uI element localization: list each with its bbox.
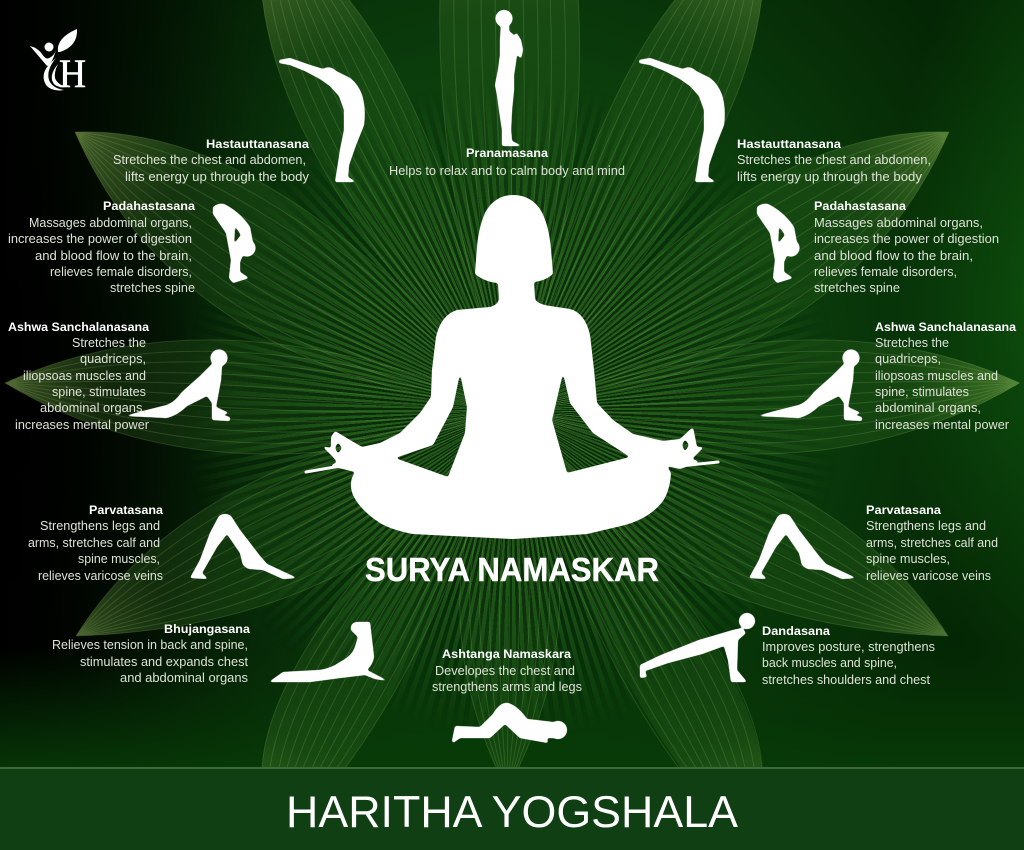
- text: Parvatasana left: Strengthens legs and: [40, 519, 160, 533]
- text: Ashwa Sanchalanasana left: quadriceps,: [80, 352, 146, 366]
- text: Padahastasana right: stretches spine: [814, 281, 900, 295]
- text: Ashtanga Namaskara: Ashtanga Namaskara: [442, 647, 571, 661]
- text: Ashwa Sanchalanasana right: abdominal organs,: [875, 401, 981, 415]
- text: Dandasana: stretches shoulders and chest: [762, 673, 931, 687]
- icon: Ashwa Sanchalanasana pose left: [125, 350, 230, 421]
- text: Padahastasana right: Massages abdominal organs,: [814, 216, 983, 230]
- heading: Surya Namaskar: SURYA NAMASKAR: [365, 551, 659, 588]
- text: Parvatasana right: arms, stretches calf and: [866, 536, 998, 550]
- text: Ashwa Sanchalanasana right: Stretches the: [875, 336, 949, 350]
- text: Parvatasana right: relieves varicose veins: [866, 569, 991, 583]
- text: Hastauttanasana left: [113, 137, 310, 184]
- text: Ashwa Sanchalanasana right: increases mental power: [875, 418, 1009, 432]
- text: Dandasana: back muscles and spine,: [762, 656, 897, 670]
- text: Padahastasana left: Padahastasana: [103, 199, 195, 213]
- text: Ashtanga Namaskara: [432, 647, 582, 694]
- logo: H: [59, 51, 86, 96]
- text: Hastauttanasana right: Stretches the chest and abdomen,: [737, 153, 931, 167]
- text: Padahastasana left: stretches spine: [110, 281, 195, 295]
- icon: Parvatasana pose left: [190, 514, 297, 579]
- icon: Padahastasana pose left: [213, 204, 256, 283]
- text: Ashwa Sanchalanasana left: abdominal organs,: [40, 401, 146, 415]
- text: Ashwa Sanchalanasana right: spine, stimulates: [875, 385, 969, 399]
- text: Parvatasana left: relieves varicose veins: [38, 569, 163, 583]
- text: Ashtanga Namaskara: strengthens arms and legs: [432, 680, 582, 694]
- text: Padahastasana right: [814, 199, 999, 295]
- text: Ashwa Sanchalanasana left: Stretches the: [72, 336, 146, 350]
- text: Padahastasana left: and blood flow to the brain,: [35, 249, 192, 263]
- text: Ashwa Sanchalanasana left: [8, 320, 149, 432]
- text: Padahastasana left: Massages abdominal organs,: [29, 216, 192, 230]
- icon: Dandasana pose: [640, 613, 755, 682]
- radial stripes behind central figure: [240, 136, 784, 682]
- text: Parvatasana left: [28, 503, 163, 583]
- icon: Parvatasana pose right: [749, 514, 856, 579]
- text: Padahastasana right: increases the power of digestion: [814, 232, 999, 246]
- text: Ashwa Sanchalanasana left: Ashwa Sanchalanasana: [8, 320, 149, 334]
- logo: [30, 29, 86, 96]
- icon: central meditating figure: [306, 195, 718, 539]
- text: Ashwa Sanchalanasana left: iliopsoas muscles and: [23, 369, 146, 383]
- text: Padahastasana right: Padahastasana: [814, 199, 906, 213]
- footer title: HARITHA YOGSHALA: [286, 788, 738, 837]
- text: Parvatasana right: [866, 503, 998, 583]
- text: Parvatasana left: Parvatasana: [89, 503, 163, 517]
- text: Ashwa Sanchalanasana left: increases mental power: [15, 418, 149, 432]
- text: Ashwa Sanchalanasana right: iliopsoas muscles and: [875, 369, 998, 383]
- icon: Ashtanga Namaskara pose: [452, 703, 567, 743]
- text: Hastauttanasana left: Stretches the chest and abdomen,: [113, 153, 306, 167]
- text: Hastauttanasana right: lifts energy up through the body: [737, 170, 923, 184]
- text: Dandasana: [762, 624, 935, 687]
- text: Padahastasana left: relieves female disorders,: [50, 265, 192, 279]
- text: Bhujangasana: and abdominal organs: [120, 671, 248, 685]
- text: Dandasana: Improves posture, strengthens: [762, 640, 935, 654]
- text: Hastauttanasana right: [737, 137, 931, 184]
- icon: Padahastasana pose right: [757, 204, 800, 283]
- text: Bhujangasana: [52, 622, 250, 685]
- text: Padahastasana right: and blood flow to the brain,: [814, 249, 973, 263]
- text: Parvatasana right: Parvatasana: [866, 503, 941, 517]
- text: Bhujangasana: Bhujangasana: [164, 622, 250, 636]
- text: Dandasana: Dandasana: [762, 624, 830, 638]
- text: Bhujangasana: Relieves tension in back and spine,: [52, 638, 248, 652]
- text: Padahastasana right: relieves female disorders,: [814, 265, 957, 279]
- text: Padahastasana left: [8, 199, 195, 295]
- text: Bhujangasana: stimulates and expands chest: [80, 655, 249, 669]
- text: Parvatasana right: spine muscles,: [866, 552, 950, 566]
- icon: Hastauttanasana pose right: [639, 58, 725, 182]
- text: Ashwa Sanchalanasana right: quadriceps,: [875, 352, 941, 366]
- icon: Hastauttanasana pose left: [279, 58, 365, 182]
- text: Ashwa Sanchalanasana right: [875, 320, 1016, 432]
- text: Pranamasana: Pranamasana: [466, 146, 548, 160]
- icon: Bhujangasana pose: [269, 622, 388, 682]
- text: Pranamasana: [389, 146, 625, 178]
- text: Hastauttanasana left: Hastauttanasana: [206, 137, 309, 151]
- text: Hastauttanasana right: Hastauttanasana: [737, 137, 841, 151]
- text: Padahastasana left: increases the power of digestion: [8, 232, 192, 246]
- footer band: [0, 767, 1024, 850]
- text: Pranamasana: Helps to relax and to calm body and mind: [389, 164, 625, 178]
- text: Ashwa Sanchalanasana left: spine, stimulates: [52, 385, 146, 399]
- text: Parvatasana left: spine muscles,: [78, 552, 160, 566]
- text: Parvatasana right: Strengthens legs and: [866, 519, 986, 533]
- text: Hastauttanasana left: lifts energy up through the body: [125, 170, 310, 184]
- text: Ashwa Sanchalanasana right: Ashwa Sanchalanasana: [875, 320, 1016, 334]
- text: Ashtanga Namaskara: Developes the chest and: [435, 664, 575, 678]
- icon: Pranamasana pose: [495, 10, 523, 146]
- icon: Ashwa Sanchalanasana pose right: [757, 350, 862, 421]
- text: Parvatasana left: arms, stretches calf and: [28, 536, 160, 550]
